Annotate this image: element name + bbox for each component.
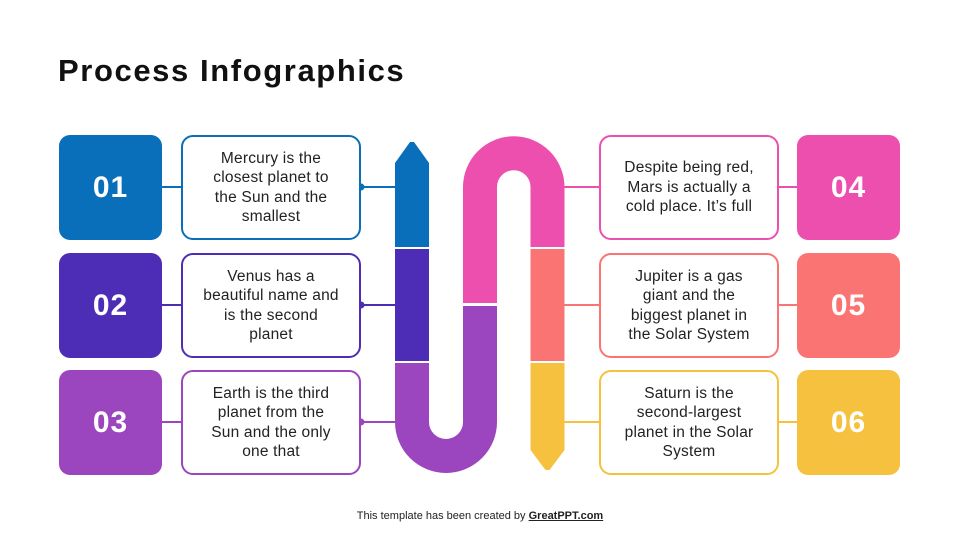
step 03 number: 03 <box>93 406 128 438</box>
step 01 text: Mercury is the closest planet to the Sun and the smallest <box>213 150 329 225</box>
step 03 text <box>181 370 361 475</box>
footer: This template has been created by GreatPPT.com <box>357 510 603 522</box>
step 04 text: Despite being red, Mars is actually a cold place. It’s full <box>624 159 754 215</box>
step 06 text <box>599 370 779 475</box>
step 05 text <box>599 253 779 358</box>
snake: segment 3 purple U <box>412 306 480 456</box>
title: Process Infographics <box>58 53 405 88</box>
step 06 number: 06 <box>831 406 866 438</box>
step 05 number <box>797 253 900 358</box>
step 01 text <box>181 135 361 240</box>
step 02 text: Venus has a beautiful name and is the second planet <box>203 268 339 343</box>
step 02 number: 02 <box>93 288 128 322</box>
step 04 number <box>797 135 900 240</box>
step 05 text: Jupiter is a gas giant and the biggest planet in the Solar System <box>628 268 750 343</box>
step 06 number <box>797 370 900 475</box>
step 06 text: Saturn is the second-largest planet in the Solar System <box>625 384 753 460</box>
step 03 number <box>59 370 162 475</box>
step 03 text: Earth is the third planet from the Sun and the only one that <box>211 384 331 460</box>
snake: segment 4 pink arch <box>480 153 548 303</box>
step 01 number <box>59 135 162 240</box>
step 02 text <box>181 253 361 358</box>
step 04 text <box>599 135 779 240</box>
snake: segment 2 indigo <box>395 249 429 361</box>
step 02 number <box>59 253 162 358</box>
snake: segment 1 blue <box>395 142 429 247</box>
snake: segment 6 yellow <box>530 363 564 470</box>
snake: segment 5 salmon <box>530 249 564 361</box>
step 05 number: 05 <box>831 288 866 322</box>
step 04 number: 04 <box>831 170 866 204</box>
step 01 number: 01 <box>93 170 128 204</box>
